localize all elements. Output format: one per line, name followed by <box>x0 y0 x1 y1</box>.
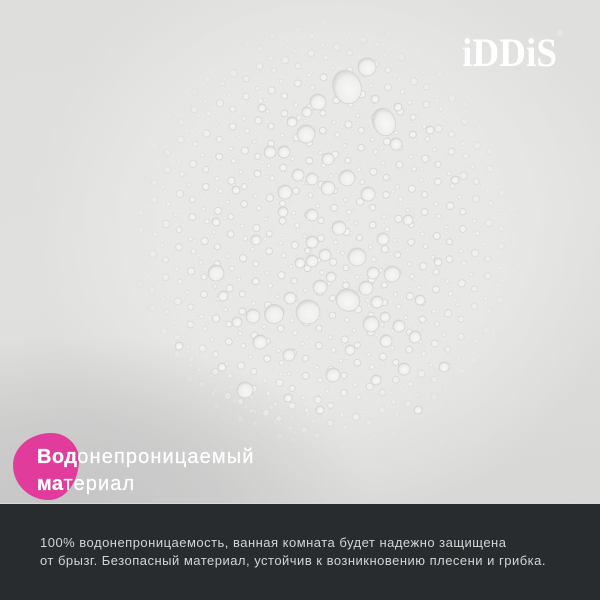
logo: IDDIS: iDDiS <box>462 30 557 75</box>
logo: IDDIS: ® <box>557 29 563 38</box>
water droplets photo <box>150 44 503 428</box>
heading: Водонепроницаемый <box>37 446 255 468</box>
description text: 100% водонепроницаемость, ванная комната будет надежно защищена <box>40 535 506 550</box>
large droplets <box>175 58 459 414</box>
tiny droplet field <box>150 44 503 428</box>
description text <box>40 535 546 568</box>
pink blob accent <box>13 433 79 500</box>
dark text band <box>0 503 600 600</box>
heading: материал <box>37 473 135 495</box>
heading <box>37 446 255 495</box>
description text: от брызг. Безопасный материал, устойчив к возникновению плесени и грибка. <box>40 552 546 568</box>
